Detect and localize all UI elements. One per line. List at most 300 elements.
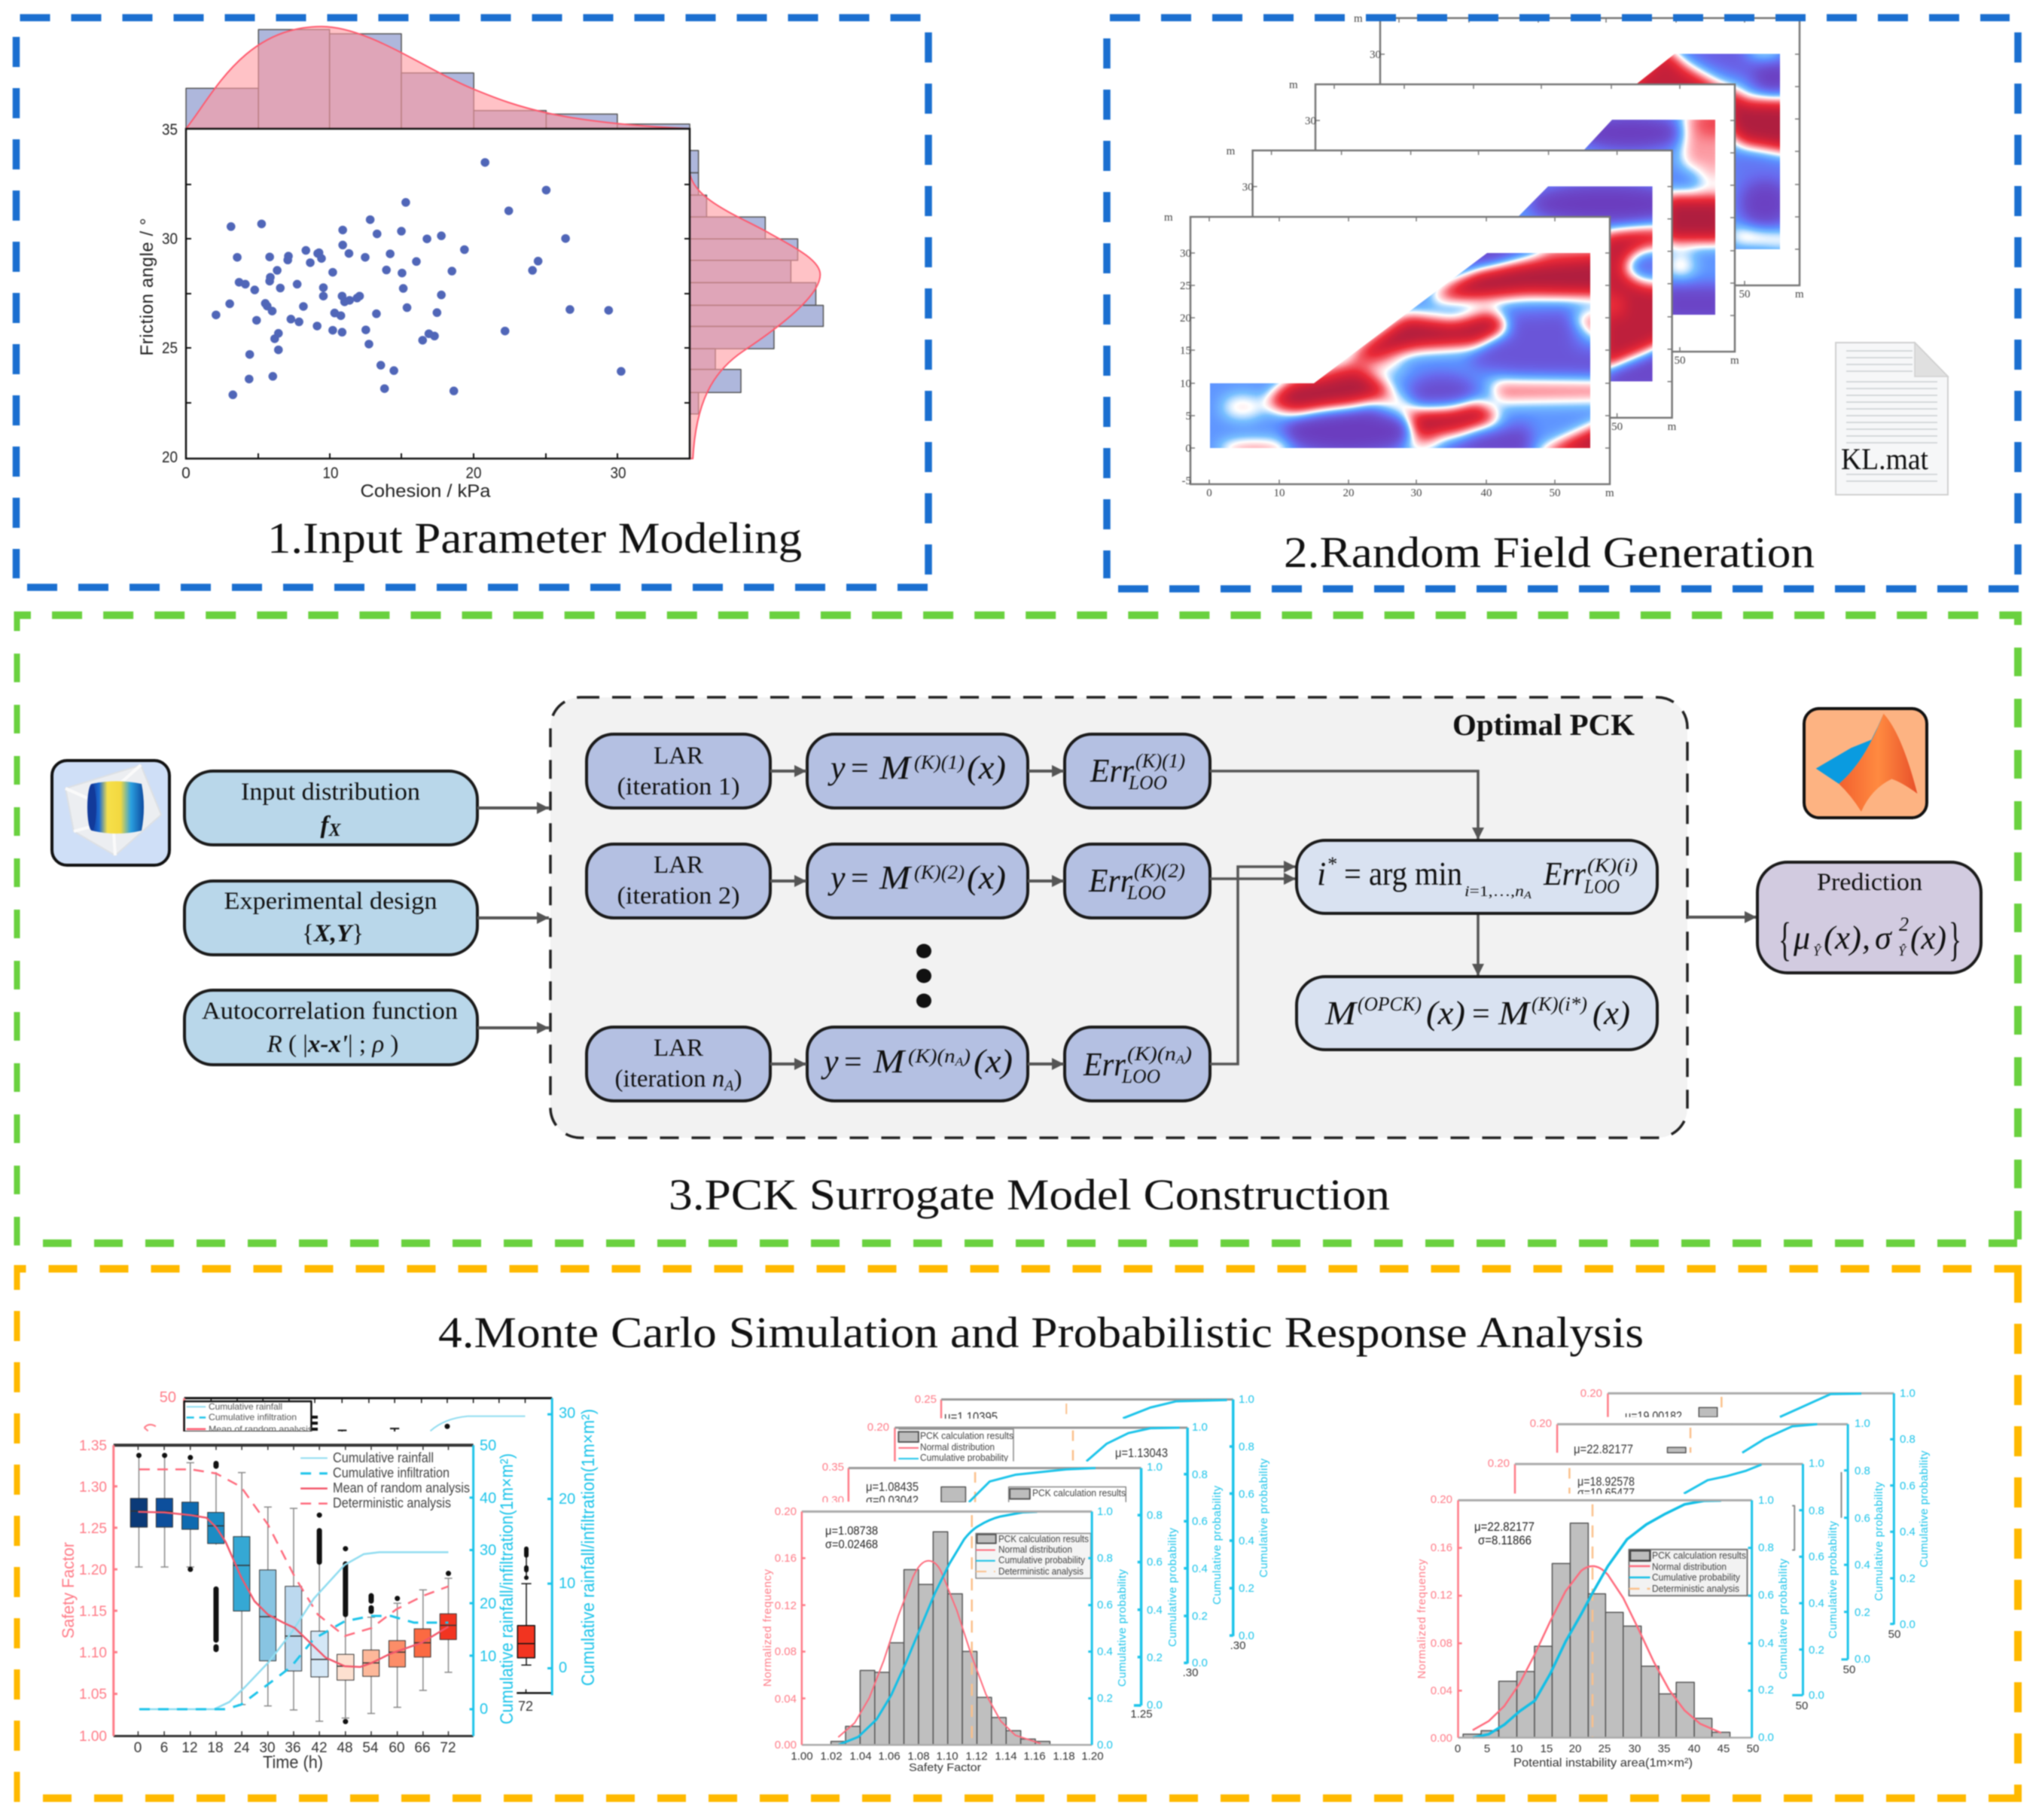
row 1: LOO error: Err [1090,752,1135,789]
chart: instability area histogram, front: 1.0 [1758,1494,1774,1507]
scatter plot axes [186,129,690,459]
panel: input parameter modeling [137,26,823,562]
chart: instability area histogram, front: 45 [1717,1742,1730,1755]
box: optimal model equation: (x) [1592,995,1630,1032]
chart: stacked safety factor histogram, back layer 2: Normal distribution [920,1441,995,1453]
chart: instability area histogram, front: 15 [1541,1742,1553,1755]
box: optimal model equation: M [1498,995,1532,1032]
chart: back safety factor time series: 50 [160,1389,176,1406]
chart: safety factor box plot over time: 1.20 [79,1562,107,1578]
chart: safety factor histogram, front: 0.6 [1097,1599,1113,1611]
chart: instability area histogram, front: 30 [1629,1742,1641,1755]
box: prediction [1757,862,1981,973]
chart: safety factor histogram, front: 0.8 [1097,1552,1113,1565]
chart: instability area histogram, front: Normalized frequency [1416,1559,1428,1679]
chart: safety factor histogram, front [761,1505,1129,1774]
chart: stacked safety factor histogram, back layer 1: Cumulative probability [1166,1527,1179,1647]
row 3: LOO error [1065,1027,1210,1101]
row 3: model equation: y [821,1043,839,1080]
chart: stacked safety factor histogram, back layer 3: 0.8 [1239,1440,1254,1453]
box: argmin equation: LOO [1583,876,1620,898]
row 1: model equation: (x) [967,749,1006,786]
box: experimental design [184,881,477,955]
chart: instability area histogram, front: 20 [1569,1742,1581,1755]
chart: stacked safety factor histogram, back layer 2: Cumulative probability [920,1452,1008,1463]
random field plot 1 (front): 5 [1185,410,1191,422]
chart: instability area histogram, front: Deterministic analysis [1652,1583,1739,1594]
dashed frame: panel 1 [17,18,928,587]
chart: safety factor box plot over time: 1.30 [79,1480,107,1495]
random field plot 1 (front): 40 [1480,487,1492,499]
scatter axis labels: 0 [181,465,190,482]
random field plot 1 (front): 50 [1550,487,1560,499]
chart: safety factor box plot over time: 0 [134,1740,142,1756]
chart: back safety factor time series: Cumulative rainfall [209,1401,282,1412]
row 2: LOO error: LOO [1126,882,1166,904]
box: prediction: (x) [1910,919,1946,956]
chart: safety factor histogram, front: 1.02 [820,1750,843,1763]
arrows: errors to argmin [1210,771,1478,1064]
row 3: LAR iteration nA: LAR [654,1035,703,1062]
chart: stacked instability area histogram, back layer 1: 0.4 [1809,1597,1824,1610]
row 3: LAR iteration nA: ) [733,1065,742,1093]
chart: stacked safety factor histogram, back layer 2: 0.2 [1192,1610,1208,1623]
row 1: model equation: (K)(1) [914,751,965,773]
box: input distribution: f [320,812,328,839]
chart: safety factor histogram, front: 1.08 [907,1750,930,1763]
chart: back safety factor time series [145,1389,599,1714]
box: argmin equation: A [1523,890,1532,901]
random field plot 3: m [1730,355,1739,367]
chart: stacked instability area histogram, back layer 3: 0.2 [1900,1572,1916,1585]
box: prediction: (x) [1824,919,1861,956]
row 2: model equation: y [827,859,846,896]
chart: safety factor box plot over time: 60 [389,1740,405,1756]
row 2: model equation: = [851,861,869,896]
chart: stacked safety factor histogram, back layer 3: Cumulative probability [1257,1458,1270,1578]
row 1: model equation [807,734,1028,808]
chart: instability area histogram, front: Potential instability area(1m×m²) [1513,1757,1693,1770]
chart: back safety factor time series: Mean of random analysis [209,1424,312,1434]
chart: instability area histogram, front [1416,1493,1790,1770]
chart: instability area histogram, front: 0.0 [1758,1731,1774,1744]
chart: safety factor histogram, front: Normalized frequency [761,1569,774,1687]
chart: safety factor histogram, front: 0.2 [1097,1692,1113,1705]
box: argmin equation: * [1327,853,1336,875]
chart: safety factor histogram, front: 0.00 [775,1739,797,1751]
chart: stacked safety factor histogram, back layer 2: 1.0 [1192,1421,1208,1434]
random field plot 1 (front): 25 [1180,280,1191,292]
row 3: model equation: (K)(n [908,1045,950,1067]
row 3: model equation: = [844,1045,862,1080]
chart: stacked instability area histogram, back layer 2: 0.6 [1855,1512,1870,1525]
chart: safety factor histogram, front: 1.14 [995,1750,1017,1763]
chart: safety factor box plot over time: 30 [480,1542,496,1559]
chart: safety factor histogram, front: 0.04 [775,1693,797,1706]
row 1: model equation: M [879,749,913,786]
chart: instability area histogram, front: 0.08 [1431,1637,1452,1650]
chart: stacked instability area histogram, back layer 1: μ=18.92578 [1577,1474,1635,1489]
box: input distribution [184,771,477,845]
heading 1: 1.Input Parameter Modeling [267,514,802,562]
chart: stacked instability area histogram, back layer 3: 0.0 [1900,1618,1916,1631]
random field plot 1 (front): -5 [1182,475,1191,487]
chart: stacked safety factor histogram, back layer 2: 0.6 [1192,1515,1208,1528]
chart: safety factor box plot over time: 50 [480,1437,496,1454]
chart: instability area histogram, front: 25 [1599,1742,1611,1755]
random field plot 4 (back): m [1354,13,1363,25]
random field plot 2 [1227,145,1696,433]
heading 2: 2.Random Field Generation [1284,528,1815,577]
box: prediction: Ŷ [1898,943,1907,959]
random field plot 1 (front): 0 [1206,487,1212,499]
box: prediction: } [1949,914,1961,965]
chart: instability area histogram, front: 0.2 [1758,1684,1774,1697]
box: optimal model equation: M [1324,995,1358,1032]
chart: stacked safety factor histogram, back layer 1: μ=1.08435 [866,1480,919,1494]
scatter axis labels: 30 [162,230,178,248]
chart: stacked safety factor histogram, back layer 3: 0.0 [1239,1629,1254,1642]
random field plot 4 (back): 50 [1739,288,1750,300]
random field plot 1 (front): 10 [1180,378,1191,390]
chart: stacked instability area histogram, back layer 3: 50 [1888,1628,1900,1641]
box: optimal model equation: (K)(i*) [1532,993,1587,1015]
row 3: model equation [807,1027,1028,1101]
chart: stacked instability area histogram, back layer 1: 0.8 [1809,1504,1824,1517]
row 3: LAR iteration nA: (iteration n [615,1065,724,1093]
chart: back safety factor time series: 72 [518,1699,533,1714]
chart: safety factor histogram, front: PCK calculation results [998,1533,1089,1544]
row 3: model equation: (x) [974,1043,1013,1080]
random field plot 4 (back) [1354,13,1816,300]
scatter axis labels: 20 [162,449,178,466]
box: prediction: , [1862,919,1870,956]
chart: safety factor box plot over time: 12 [181,1740,198,1756]
chart: instability area histogram, front: 10 [1510,1742,1522,1755]
chart: stacked safety factor histogram, back layer 2: 0.0 [1192,1657,1208,1669]
chart: stacked safety factor histogram, back layer 1: 0.35 [822,1461,844,1474]
chart: stacked instability area histogram, back layer 1: 0.0 [1809,1689,1824,1702]
chart: stacked instability area histogram, back layer 3: Cumulative probability [1918,1450,1931,1568]
chart: safety factor histogram, front: 1.00 [791,1750,813,1763]
random field plot 1 (front): m [1164,212,1173,224]
chart: instability area histogram, front: 35 [1658,1742,1670,1755]
chart: stacked instability area histogram, back layer 2: μ=22.82177 [1574,1442,1633,1456]
row 1: LAR iteration 1 [587,734,770,808]
chart: safety factor box plot over time [59,1431,517,1772]
chart: safety factor box plot over time: 1.00 [79,1729,107,1745]
chart: stacked instability area histogram, back layer 2: Cumulative probability [1873,1482,1885,1601]
chart: instability area histogram, front: 0.04 [1431,1684,1452,1697]
arrow: optimal PCK to prediction [1687,916,1757,919]
chart: safety factor histogram, front: σ=0.02468 [825,1538,878,1551]
chart: stacked safety factor histogram, back layer 1: PCK calculation results [1032,1487,1126,1498]
chart: stacked safety factor histogram, back layer 2: μ=1.13043 [1115,1446,1168,1460]
row 3: LOO error: Err [1083,1046,1126,1083]
row 3: LOO error: A [1175,1053,1184,1066]
chart: stacked safety factor histogram, back layer 1: 0.0 [1147,1699,1163,1712]
chart: back safety factor time series: 0 [559,1660,567,1676]
chart: safety factor box plot over time: Cumulative rainfall/infiltration(1m×m²) [497,1453,517,1724]
chart: instability area histogram, front: 0.8 [1758,1541,1774,1554]
chart: stacked instability area histogram, back layer 1: 0.2 [1809,1644,1824,1657]
chart: stacked safety factor histogram, back layer 1: 0.30 [822,1494,844,1507]
scatter axis labels: 35 [162,121,178,139]
chart: stacked safety factor histogram, back layer 3: 1.0 [1239,1393,1254,1406]
chart: safety factor box plot over time: 20 [480,1596,496,1612]
row 2: model equation: M [879,859,913,896]
marginal histogram: cohesion [186,26,690,129]
chart: stacked safety factor histogram, back layer 1: 1.0 [1147,1461,1163,1474]
chart: stacked safety factor histogram, back layer 2 [858,1421,1224,1679]
icon: COMSOL [52,761,169,865]
chart: stacked safety factor histogram, back layer 1 [791,1461,1179,1721]
row 3: LOO error: (K)(n [1127,1043,1169,1065]
box: autocorrelation function: R ( |x-x'| ; ρ ) [267,1031,398,1058]
chart: stacked instability area histogram, back layer 1: 0.6 [1809,1550,1824,1563]
box: prediction: 2 [1899,913,1909,935]
heading 3: 3.PCK Surrogate Model Construction [669,1170,1390,1219]
chart: instability area histogram, front: 0.00 [1431,1732,1452,1745]
box: prediction: { [1778,914,1791,965]
chart: stacked instability area histogram, back layer 3 [1580,1387,1931,1641]
optimal PCK container: Optimal PCK [1452,708,1635,742]
chart: safety factor box plot over time: 40 [480,1490,496,1507]
row 1: LOO error: LOO [1128,772,1167,794]
box: autocorrelation function: Autocorrelation function [202,998,458,1025]
row 3: LOO error: LOO [1121,1065,1160,1087]
chart: stacked safety factor histogram, back layer 2: PCK calculation results [920,1430,1013,1441]
box: prediction: Prediction [1817,869,1922,896]
chart: instability area histogram, front: 5 [1484,1742,1490,1755]
chart: stacked safety factor histogram, back layer 2: 0.4 [1192,1562,1208,1575]
chart: instability area histogram, front: 0.20 [1431,1493,1452,1506]
random field plot 2: 50 [1611,421,1623,433]
chart: safety factor box plot over time: 0 [480,1701,488,1718]
chart: safety factor box plot over time: 36 [285,1740,301,1756]
box: autocorrelation function [184,990,477,1065]
chart: safety factor histogram, front: 1.20 [1081,1750,1104,1763]
chart: safety factor histogram, front: Normal distribution [998,1544,1072,1555]
chart: safety factor box plot over time: 10 [480,1648,496,1665]
row 1: LAR iteration 1: LAR [654,742,703,770]
arrows: row connectors [770,771,1064,1064]
chart: instability area histogram, front: 0.4 [1758,1637,1774,1650]
box: argmin equation: = arg min [1344,855,1462,892]
chart: safety factor histogram, front: 1.16 [1023,1750,1046,1763]
chart: instability area histogram, front: μ=22.82177 [1474,1520,1535,1534]
scatter axis labels [137,121,626,501]
chart: safety factor histogram, front: Deterministic analysis [998,1565,1084,1577]
icon: KL.mat file [1836,343,1948,495]
chart: stacked instability area histogram, back layer 3: 1.0 [1900,1387,1916,1400]
row 2: LAR iteration 2: LAR [654,852,703,879]
row 1: model equation: y [827,749,846,786]
chart: instability area histogram, front: 0.16 [1431,1541,1452,1554]
row 2: model equation: (K)(2) [914,861,965,883]
dashed frame: panel 2 [1107,18,2019,589]
row 3: model equation: ) [962,1045,971,1067]
random field plot 1 (front): 0 [1185,443,1191,455]
random field plot 1 (front): 20 [1343,487,1354,499]
box: optimal model equation: = [1472,997,1490,1032]
chart: instability area histogram, front: 0.6 [1758,1589,1774,1602]
chart: stacked instability area histogram, back layer 3: 0.8 [1900,1433,1916,1446]
box: prediction: σ [1875,919,1893,956]
chart: safety factor box plot over time: Cumulative infiltration [333,1465,450,1480]
chart: safety factor histogram, front: μ=1.08738 [825,1525,878,1538]
random field plot 3: 50 [1675,355,1685,367]
chart: instability area histogram, front: Cumulative probability [1777,1559,1790,1679]
icon: KL.mat file: KL.mat [1841,442,1928,476]
chart: instability area histogram, front: 0.12 [1431,1589,1452,1602]
row 2: LOO error [1065,844,1210,918]
chart: back safety factor time series: Cumulative rainfall/infiltration(1m×m²) [578,1409,599,1686]
box: experimental design: {X,Y} [302,920,364,947]
heading 4: 4.Monte Carlo Simulation and Probabilistic Response Analysis [438,1308,1644,1357]
chart: stacked instability area histogram, back layer 3: 0.20 [1580,1387,1602,1400]
chart: back safety factor time series: Cumulative infiltration [209,1412,297,1422]
scatter axis labels: 30 [610,465,626,482]
box: experimental design: Experimental design [224,888,437,915]
chart: stacked safety factor histogram, back layer 1: 1.25 [1130,1708,1153,1721]
chart: safety factor box plot over time: 42 [311,1740,328,1756]
box: argmin equation: i=1,…, n [1464,883,1522,900]
panel: Monte Carlo simulation and probabilistic response analysis [59,1308,1931,1774]
chart: safety factor box plot over time: 18 [207,1740,224,1756]
chart: stacked instability area histogram, back layer 2: 0.20 [1530,1417,1552,1430]
row 3: model equation: A [954,1056,964,1069]
chart: safety factor box plot over time: 54 [362,1740,379,1756]
box: optimal model equation: (OPCK) [1358,993,1422,1015]
row 1: LAR iteration 1: (iteration 1) [617,773,739,800]
chart: safety factor histogram, front: Cumulative probability [998,1554,1085,1565]
chart: stacked instability area histogram, back layer 3: 0.6 [1900,1480,1916,1492]
box: argmin equation: (K)(i) [1587,855,1638,876]
chart: safety factor box plot over time: 66 [414,1740,431,1756]
chart: stacked instability area histogram, back layer 2: 50 [1843,1663,1855,1676]
chart: safety factor box plot over time: 1.10 [79,1645,107,1661]
ellipsis dots [916,944,931,1008]
chart: stacked safety factor histogram, back layer 1: σ=0.03042 [866,1493,919,1508]
chart: safety factor histogram, front: 1.10 [936,1750,959,1763]
chart: stacked safety factor histogram, back layer 3: .30 [1230,1639,1245,1652]
row 2: LOO error: (K)(2) [1134,860,1185,882]
chart: safety factor box plot over time: Mean of random analysis [333,1480,470,1495]
box: input distribution: X [328,821,341,840]
chart: safety factor histogram, front: 0.4 [1097,1645,1113,1658]
row 1: LOO error [1065,734,1210,808]
chart: back safety factor time series: 30 [559,1405,575,1422]
chart: stacked safety factor histogram, back layer 3: μ=1.10395 [944,1410,998,1424]
chart: safety factor histogram, front: 1.12 [965,1750,988,1763]
row 3: model equation: M [873,1043,907,1080]
scatter axis labels: 10 [322,465,339,482]
row 2: LAR iteration 2: (iteration 2) [617,883,739,910]
chart: stacked instability area histogram, back layer 2: 0.8 [1855,1465,1870,1477]
chart: safety factor box plot over time: 1.15 [79,1604,107,1620]
box: argmin equation: i [1317,855,1326,892]
chart: stacked safety factor histogram, back layer 3: 0.25 [915,1393,937,1406]
chart: safety factor histogram, front: 0.16 [775,1552,797,1565]
chart: stacked instability area histogram, back layer 2: 1.0 [1855,1417,1870,1430]
chart: stacked instability area histogram, back layer 3: 0.4 [1900,1526,1916,1538]
chart: stacked safety factor histogram, back layer 1: 0.6 [1147,1556,1163,1568]
chart: stacked safety factor histogram, back layer 2: 0.20 [867,1421,889,1434]
random field plot 4 (back): 30 [1370,49,1381,61]
chart: stacked safety factor histogram, back layer 3: 0.4 [1239,1535,1254,1547]
chart: stacked instability area histogram, back layer 1: Cumulative probability [1827,1521,1839,1639]
chart: safety factor histogram, front: 0.20 [775,1505,797,1518]
chart: safety factor histogram, front: 1.18 [1053,1750,1075,1763]
chart: safety factor histogram, front: 1.0 [1097,1505,1113,1518]
chart: stacked safety factor histogram, back layer 3: 0.2 [1239,1582,1254,1595]
row 1: model equation: = [851,751,869,786]
chart: stacked instability area histogram, back layer 2: 0.4 [1855,1559,1870,1572]
chart: back safety factor time series: 10 [559,1575,575,1592]
box: argmin equation [1297,840,1657,913]
box: prediction: Ŷ [1813,943,1822,959]
random field plot 4 (back): m [1795,288,1804,300]
chart: instability area histogram, front: Cumulative probability [1652,1572,1740,1583]
chart: instability area histogram, front: 40 [1688,1742,1700,1755]
chart: stacked instability area histogram, back layer 2: 0.2 [1855,1606,1870,1619]
random field plot 1 (front): 20 [1180,312,1191,325]
row 2: model equation [807,844,1028,918]
chart: safety factor histogram, front: 1.04 [849,1750,872,1763]
random field plot 2: 30 [1242,181,1254,194]
chart: safety factor box plot over time: 30 [259,1740,276,1756]
chart: stacked instability area histogram, back layer 3: μ=19.00182 [1625,1409,1682,1423]
chart: safety factor box plot over time: Time (h) [263,1752,323,1772]
marginal histogram: friction angle [690,151,823,459]
chart: safety factor histogram, front: 1.06 [878,1750,901,1763]
chart: safety factor box plot over time: Cumulative rainfall [333,1450,434,1465]
chart: safety factor box plot over time: 24 [233,1740,250,1756]
random field plot 3 [1289,79,1756,367]
row 3: LOO error: ) [1183,1043,1192,1065]
random field plot 1 (front): 30 [1411,487,1422,499]
random field plot 2: m [1227,145,1236,157]
chart: stacked instability area histogram, back layer 2: 0.0 [1855,1653,1870,1666]
chart: stacked instability area histogram, back layer 1 [1488,1457,1839,1712]
chart: safety factor box plot over time: Safety Factor [59,1542,78,1639]
chart: safety factor box plot over time: 6 [160,1740,168,1756]
chart: safety factor histogram, front: 0.12 [775,1599,797,1612]
box: input distribution: Input distribution [241,779,420,806]
chart: stacked safety factor histogram, back layer 2: Cumulative probability [1211,1485,1224,1605]
chart: stacked instability area histogram, back layer 1: 50 [1796,1700,1808,1712]
chart: instability area histogram, front: Normal distribution [1652,1561,1727,1572]
random field plot 2: m [1668,421,1677,433]
chart: stacked safety factor histogram, back layer 1: 0.8 [1147,1509,1163,1522]
optimal PCK container [550,697,1687,1138]
dashed frame: panel 3 [14,611,2022,1247]
random field plot 1 (front): 10 [1274,487,1285,499]
chart: safety factor histogram, front: Cumulative probability [1116,1569,1129,1687]
row 3: LAR iteration nA [587,1027,770,1101]
random field plot 1 (front): 15 [1180,345,1191,357]
random field plot 1 (front): m [1605,487,1614,499]
random field plot 1 (front): 30 [1180,248,1191,260]
chart: instability area histogram, front: 50 [1747,1742,1759,1755]
chart: safety factor box plot over time: 1.35 [79,1438,107,1454]
box: optimal model equation: (x) [1426,995,1465,1032]
random field plot 1 (front) [1164,212,1635,499]
chart: back safety factor time series: 20 [559,1491,575,1508]
scatter axis labels: Cohesion / kPa [360,481,491,501]
box: prediction: μ [1793,919,1810,956]
